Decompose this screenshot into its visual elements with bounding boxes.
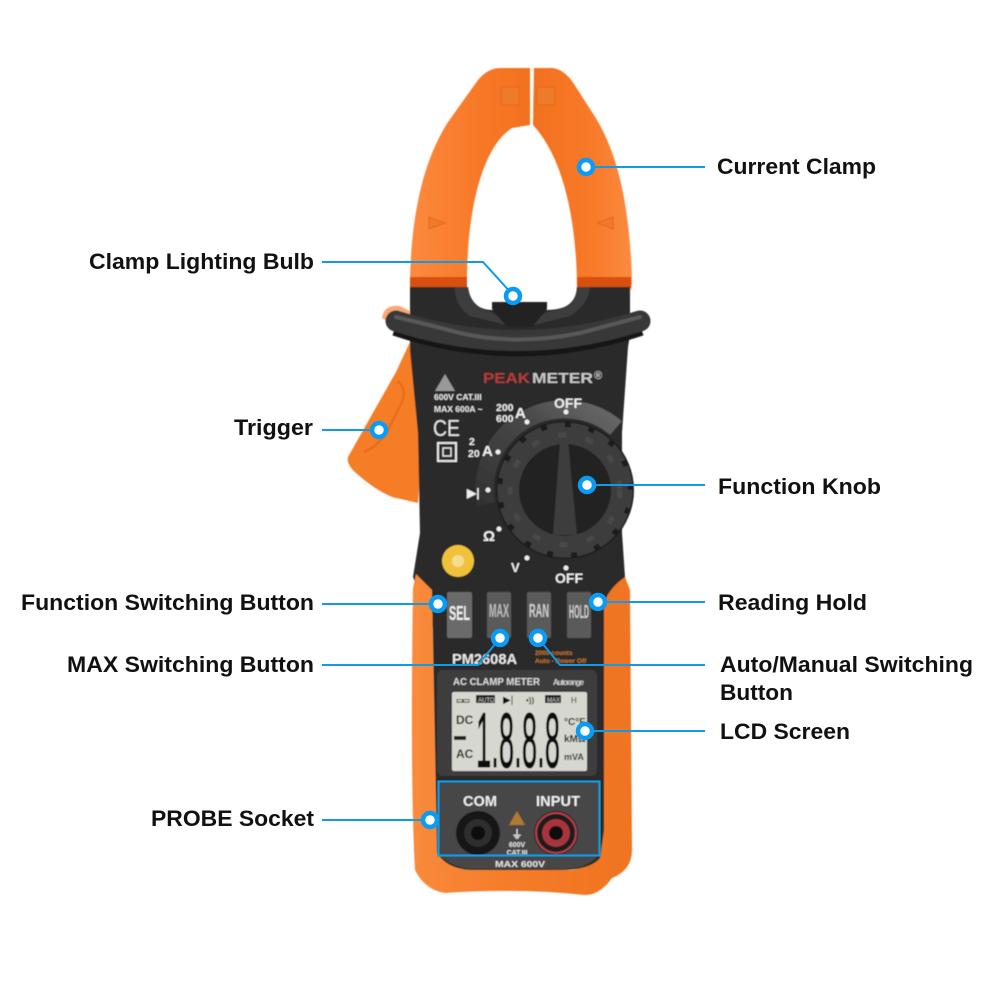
dial labels: A (515, 405, 526, 422)
LCD screen: MAX (547, 698, 560, 704)
bumper left tip glow (382, 306, 412, 330)
COM socket (456, 811, 500, 855)
dial labels: OFF (555, 570, 583, 586)
buttons: SEL (449, 603, 470, 625)
yellow bulb button (442, 545, 474, 577)
callout: LCD Screen (578, 719, 850, 744)
LCD screen (452, 692, 587, 784)
callout: Current Clamp (579, 154, 876, 179)
callout: MAX Switching Button (67, 631, 507, 677)
meter body (410, 287, 632, 895)
COM label: COM (463, 794, 497, 810)
LCD screen: AC (456, 747, 474, 761)
rubber bumper (396, 317, 640, 346)
orange lower housing (412, 574, 632, 895)
brand logo (483, 370, 602, 387)
dial labels: A (482, 443, 493, 460)
dial labels (466, 395, 583, 586)
callout: Reading Hold: Reading Hold (718, 590, 867, 615)
autorange label: Autorange (553, 678, 585, 687)
buttons (447, 592, 591, 638)
LCD screen: DC (456, 713, 474, 727)
function knob (496, 421, 634, 559)
clamp meter device (348, 68, 640, 895)
callout: Function Switching Button (21, 590, 445, 615)
callout: Trigger (234, 415, 386, 440)
callout: PROBE Socket (151, 806, 437, 831)
LCD screen: ▭▭ (456, 696, 470, 705)
LCD screen: °C°F (564, 717, 585, 728)
callout: Trigger: Trigger (234, 415, 313, 440)
dial labels: 20 (468, 448, 480, 460)
dial ring (485, 409, 616, 504)
socket warnings: CAT.III (507, 850, 527, 857)
safety markings: CE (433, 415, 460, 441)
callout: Function Knob: Function Knob (718, 474, 881, 499)
LCD screen: AUTO (478, 698, 495, 704)
LCD screen: ▶| (503, 695, 513, 706)
callout: Auto/Manual Switching Button: Auto/Manual Switching (720, 652, 973, 677)
dial labels: 2 (469, 436, 475, 448)
dial labels: Ω (483, 528, 495, 545)
socket panel (438, 782, 600, 869)
safety markings (433, 374, 483, 461)
clamp meter device: 1.8.8.8 (476, 696, 560, 784)
clamp lighting bulb (492, 302, 547, 327)
counts note: Auto - Power Off (535, 658, 587, 665)
counts note (535, 650, 587, 665)
callout: Clamp Lighting Bulb: Clamp Lighting Bulb (89, 249, 314, 274)
clamp meter device: HOLD (569, 602, 589, 622)
counts note: 2000 counts (535, 650, 573, 657)
safety markings: 600V CAT.III (434, 392, 482, 402)
dial labels: 200 (496, 402, 514, 414)
buttons: RAN (529, 601, 549, 621)
socket warnings (507, 811, 527, 857)
current clamp (410, 68, 632, 290)
dial labels: V (511, 560, 520, 575)
callout: Function Knob (580, 474, 881, 499)
max voltage note: MAX 600V (495, 860, 546, 869)
LCD screen: •)) (526, 696, 534, 705)
buttons: MAX (489, 601, 509, 621)
callout: Current Clamp: Current Clamp (717, 154, 876, 179)
callout: LCD Screen: LCD Screen (720, 719, 850, 744)
socket warnings: 600V (509, 842, 525, 849)
callout: Clamp Lighting Bulb (89, 249, 520, 303)
dial labels: 600 (496, 413, 514, 425)
safety markings: MAX 600A ~ (434, 404, 483, 414)
callout: MAX Switching Button: MAX Switching Button (67, 652, 314, 677)
INPUT socket (534, 811, 578, 855)
INPUT label: INPUT (536, 794, 580, 810)
brand logo: METER (532, 370, 593, 387)
model number: PM2608A (452, 651, 517, 668)
callout: Auto/Manual Switching Button: Button (720, 680, 793, 705)
probe socket box (438, 782, 600, 856)
dial labels: ▶| (466, 486, 480, 500)
LCD bezel (437, 670, 597, 776)
LCD screen: H (571, 696, 577, 705)
brand logo: ® (594, 370, 602, 382)
dial labels: OFF (554, 395, 582, 411)
trigger (348, 342, 424, 503)
callout: Function Switching Button: Function Switching Button (21, 590, 314, 615)
callout: PROBE Socket: PROBE Socket (151, 806, 315, 831)
socket warnings: ⏚ (512, 828, 522, 841)
LCD screen: kMΩ (564, 734, 586, 745)
brand logo: PEAK (483, 370, 530, 387)
callout: Auto/Manual Switching Button (531, 631, 973, 705)
callout: Reading Hold (591, 590, 867, 615)
LCD screen: mVA (564, 752, 584, 762)
LCD heading: AC CLAMP METER (453, 676, 540, 688)
